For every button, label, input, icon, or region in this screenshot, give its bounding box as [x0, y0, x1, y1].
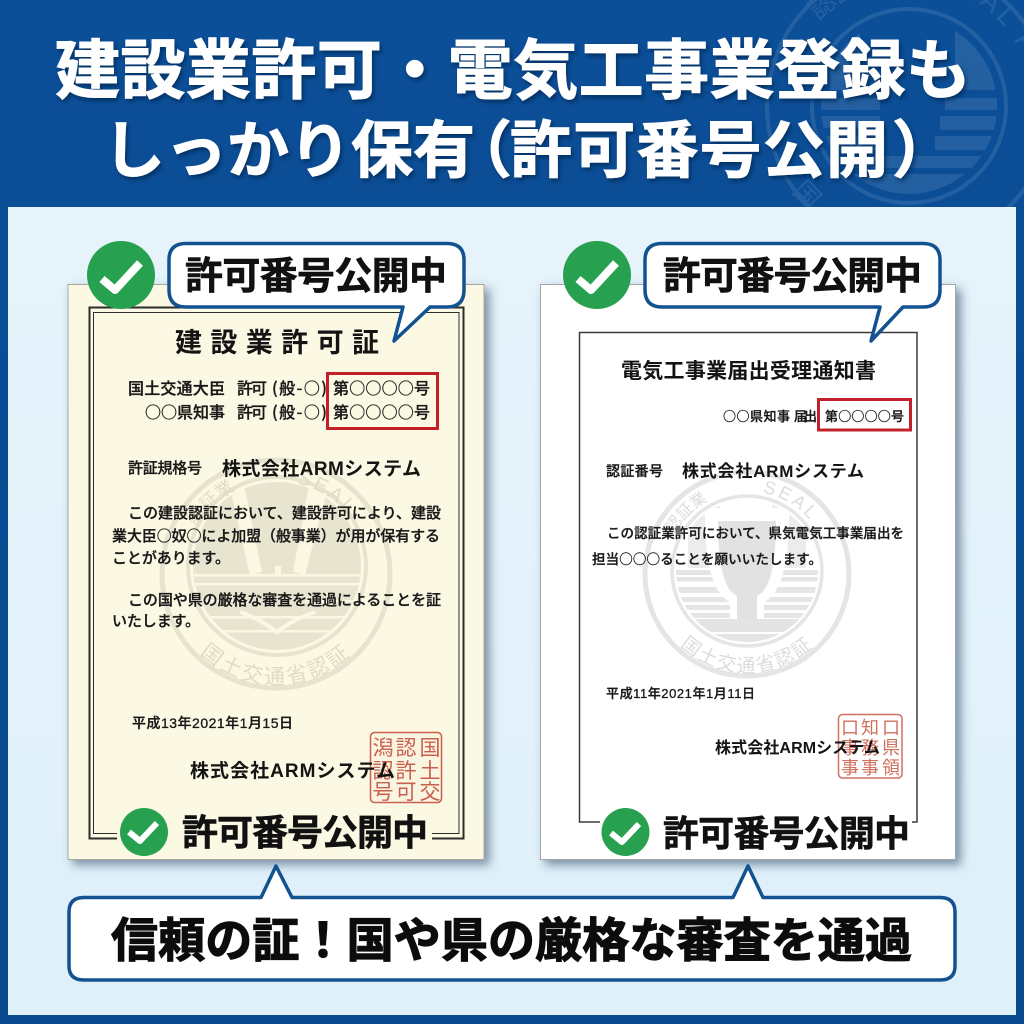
red stamp: 事	[841, 758, 859, 778]
permit lines: (般-○)	[272, 375, 327, 399]
permit lines	[128, 375, 430, 423]
red stamp: 領	[882, 758, 900, 778]
red stamp: 許	[396, 760, 416, 783]
red stamp: 県	[882, 738, 900, 758]
red stamp	[838, 714, 902, 778]
red stamp: 認	[396, 737, 416, 760]
certificate heading: 建設業許可証	[175, 328, 379, 358]
body paragraph 2	[112, 591, 441, 630]
frame	[580, 332, 917, 822]
red highlight box	[818, 400, 910, 430]
permit lines: 国土交通大臣	[128, 380, 225, 398]
title	[55, 34, 971, 186]
company row: 認証番号	[606, 463, 663, 479]
date: 平成11年2021年1月11日	[606, 686, 755, 701]
watermark seal	[642, 470, 852, 678]
header seal watermark	[765, 0, 1024, 207]
red highlight box	[328, 374, 438, 428]
title: （	[450, 117, 512, 186]
document sheet	[68, 284, 484, 860]
company row	[128, 458, 421, 480]
red stamp: 認	[372, 760, 394, 783]
notification number line: 届出	[794, 409, 817, 424]
company row: 許証規格号	[128, 460, 202, 477]
red stamp: 口	[882, 718, 900, 738]
callout: trust message	[69, 866, 955, 980]
red stamp: 事	[841, 738, 859, 758]
title: しっかり保有	[103, 117, 475, 186]
date: 平成13年2021年1月15日	[132, 715, 293, 731]
red stamp	[370, 732, 442, 804]
permit lines: (般-○)	[272, 399, 327, 423]
body paragraph 2: いたします。	[112, 613, 200, 630]
company signature: 株式会社ARMシステム	[190, 760, 395, 782]
body paragraph 1: ことがあります。	[112, 549, 230, 567]
title: 許可番号公開	[510, 117, 888, 186]
body paragraph 1	[112, 505, 441, 567]
double frame	[90, 308, 464, 838]
company row: 株式会社ARMシステム	[222, 458, 421, 480]
red stamp: 口	[841, 718, 859, 738]
panel: construction permit certificate	[65, 241, 497, 872]
body paragraph: 担当○○○ることを願いいたします。	[592, 548, 822, 568]
red stamp: 国	[420, 737, 440, 760]
company row: 株式会社ARMシステム	[682, 462, 864, 481]
red stamp: 可	[396, 781, 416, 804]
red stamp: 知	[861, 718, 879, 738]
permit lines: 第○○○○号	[333, 375, 430, 399]
watermark seal: 認証業	[185, 479, 234, 526]
red stamp: 土	[420, 760, 440, 783]
watermark seal: SEAL	[764, 482, 814, 519]
body paragraph 1: 業大臣○奴○によ加盟（般事業）が用が保有する	[112, 525, 440, 546]
red stamp: 事	[861, 758, 879, 778]
icon: check badge	[563, 241, 631, 309]
bottom label	[117, 808, 432, 856]
permit lines: 許可	[237, 404, 267, 422]
icon: check badge	[87, 241, 155, 309]
body paragraph: この認証業許可において、県気電気工事業届出を	[607, 525, 904, 541]
permit lines: 許可	[237, 380, 267, 398]
red stamp: 交	[420, 781, 440, 804]
content panel	[8, 207, 1016, 1015]
speech bubble	[169, 244, 464, 341]
bottom label: 許可番号公開中	[182, 812, 428, 853]
title: 建設業許可・電気工事業登録も	[55, 34, 971, 107]
watermark seal: 国土交通省認証	[200, 642, 350, 686]
body paragraph 2: この国や県の厳格な審査を通過によることを証	[128, 591, 441, 609]
header seal watermark: 国土交通省	[792, 179, 823, 207]
notice heading: 電気工事業届出受理通知書	[621, 359, 876, 383]
body paragraph 1: この建設認証において、建設許可により、建設	[128, 505, 441, 522]
panel: electrical work notification	[538, 241, 968, 872]
watermark seal	[160, 458, 392, 690]
speech bubble	[645, 244, 940, 341]
watermark seal: 認証業	[664, 491, 708, 533]
icon: check	[120, 808, 168, 856]
permit lines: 第○○○○号	[333, 399, 430, 423]
body paragraph	[592, 525, 904, 568]
notification number line	[723, 406, 904, 425]
bottom label	[600, 808, 912, 856]
red stamp: 潟	[372, 737, 394, 760]
notification number line: ○○県知事	[723, 406, 790, 425]
callout: trust message: 信頼の証！国や県の厳格な審査を通過	[111, 914, 912, 967]
permit lines: ○○県知事	[145, 399, 225, 423]
title: ）	[892, 117, 954, 186]
document sheet	[540, 284, 956, 860]
bottom label: 許可番号公開中	[663, 813, 910, 854]
speech bubble: 許可番号公開中	[663, 256, 922, 298]
company signature: 株式会社ARMシステム	[715, 739, 880, 757]
red stamp: 務	[861, 738, 879, 758]
red stamp: 号	[372, 781, 394, 804]
watermark seal: 国土交通省認証	[680, 635, 812, 674]
speech bubble: 許可番号公開中	[185, 256, 447, 298]
watermark seal: SEAL	[298, 472, 352, 513]
icon: check	[602, 808, 650, 856]
notification number line: 第○○○○号	[825, 406, 904, 425]
